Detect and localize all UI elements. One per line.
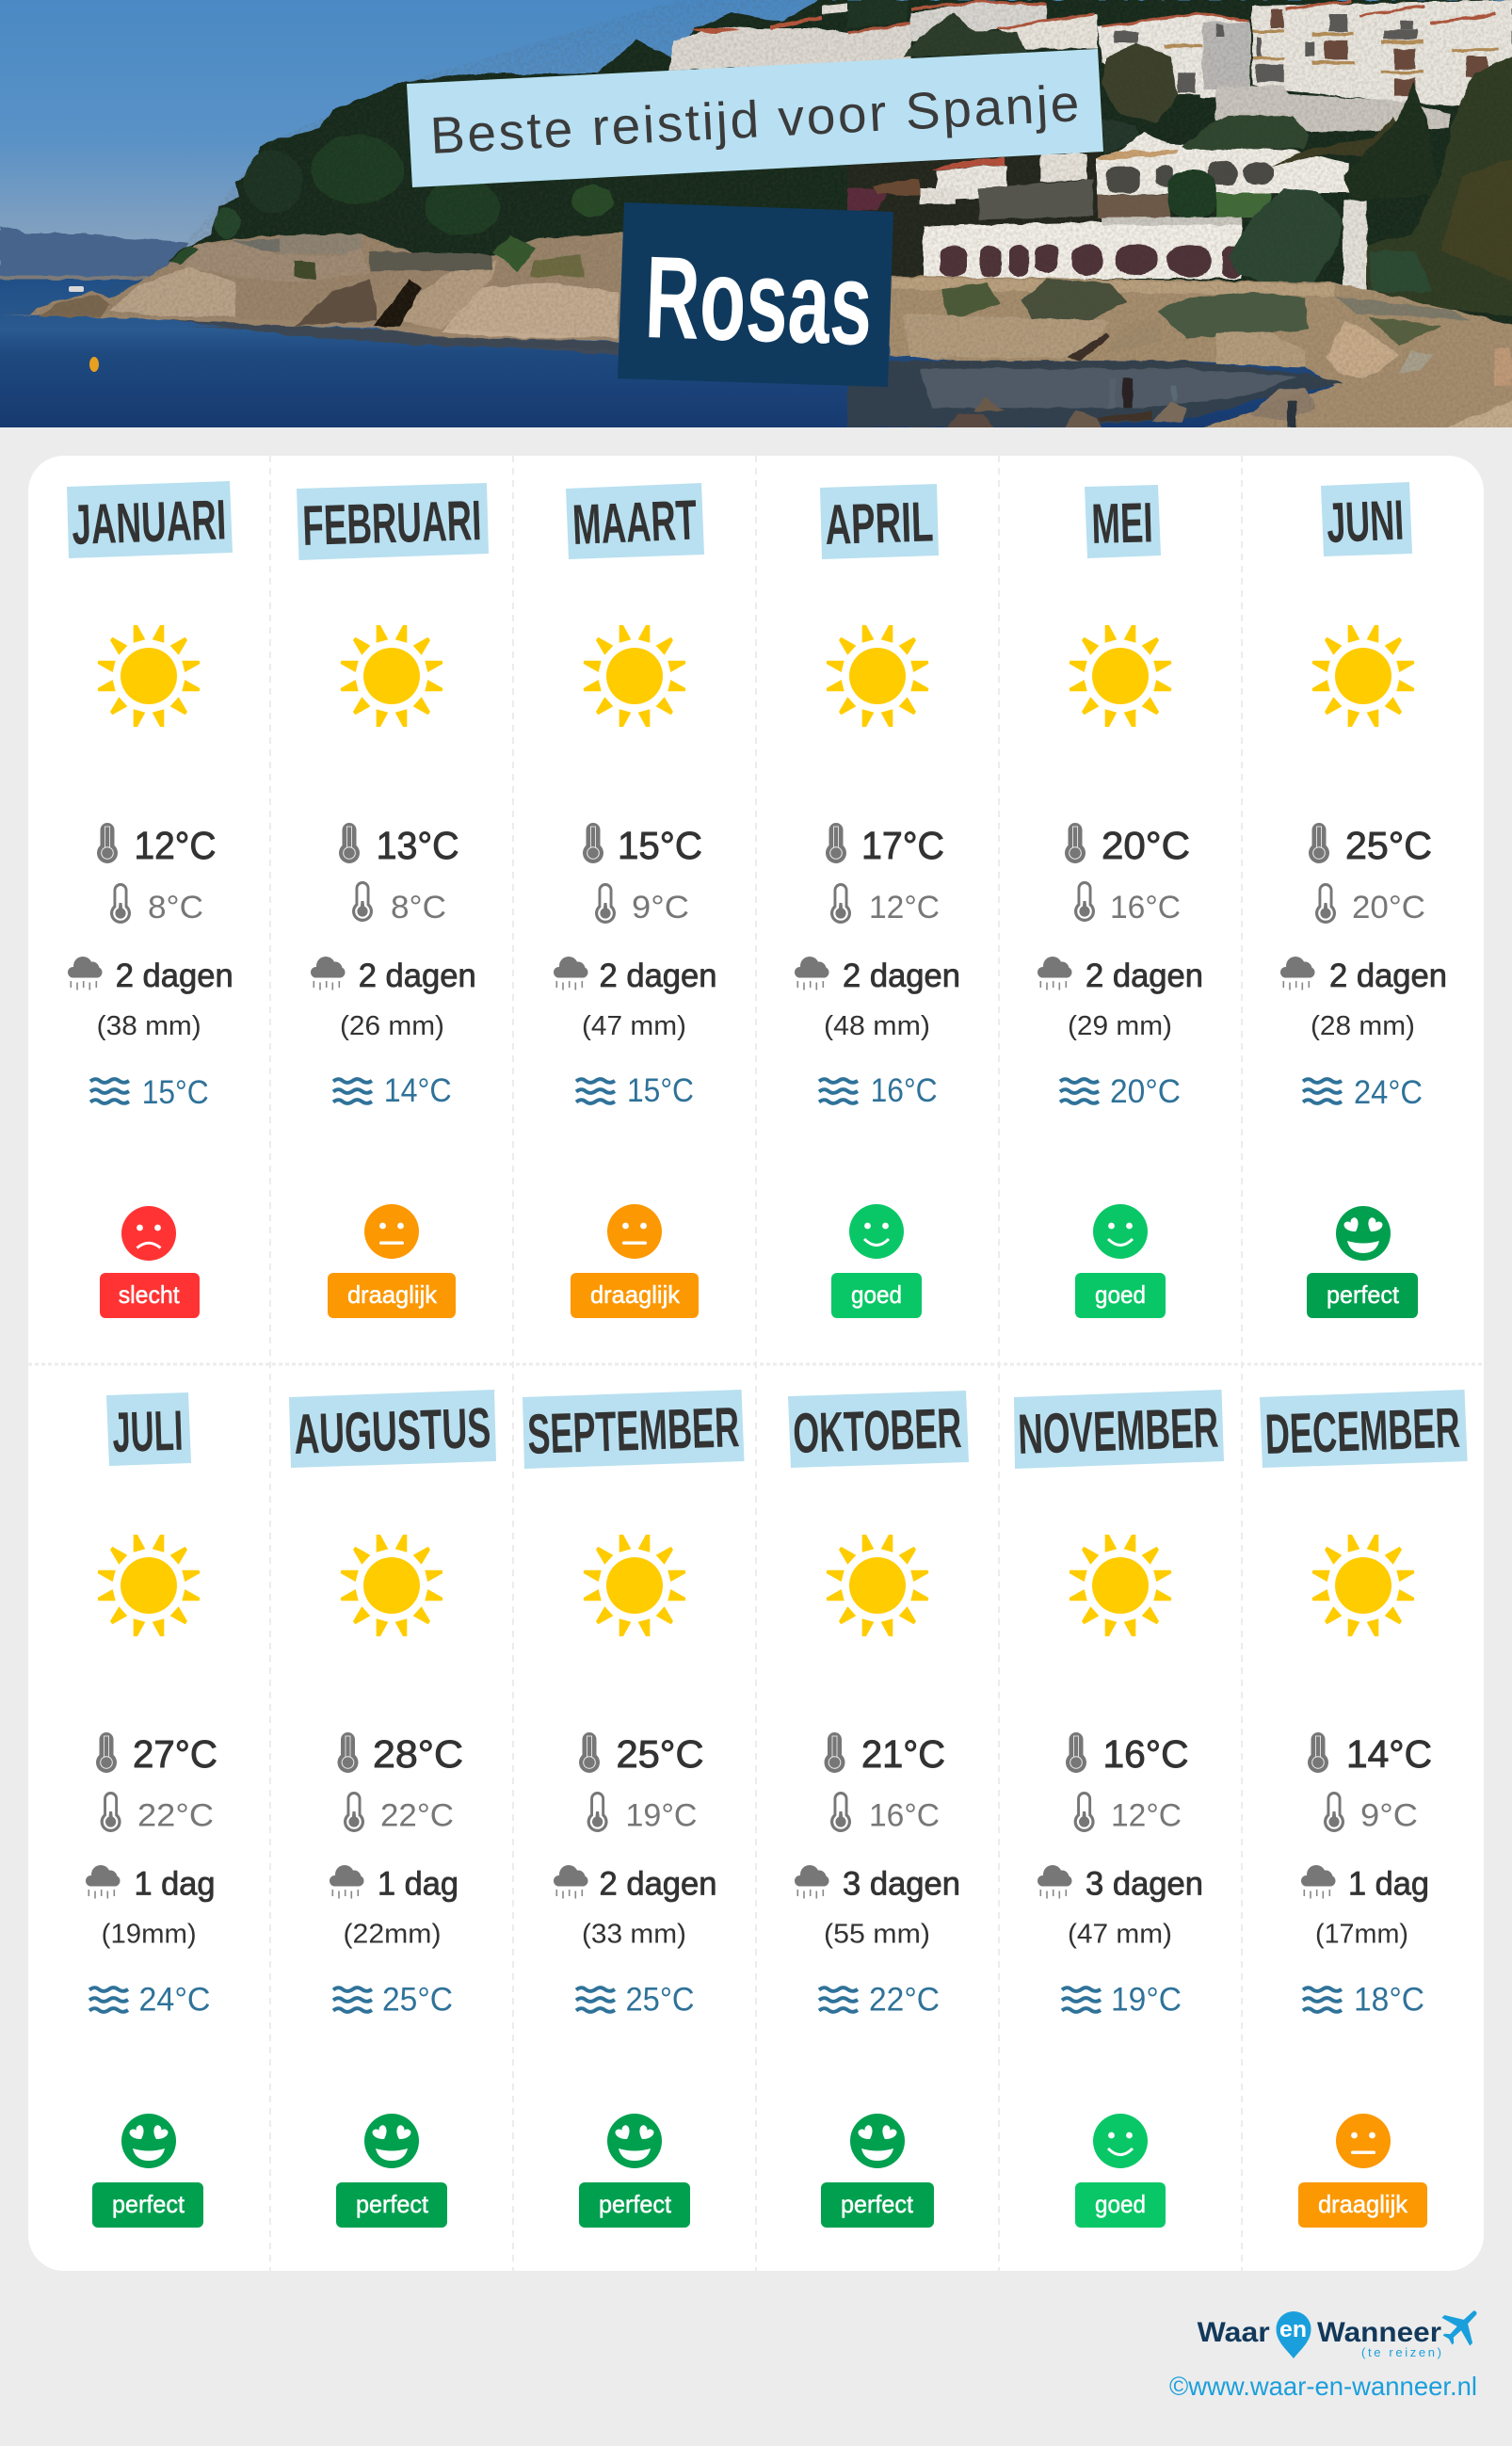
minimum temperature: 8°C <box>148 890 203 925</box>
rainfall: (28 mm) <box>1311 1011 1415 1041</box>
left-hand cliff details drawn in crop coordinates <box>0 135 626 350</box>
month heading <box>523 1390 744 1469</box>
minimum temperature <box>1074 1792 1182 1834</box>
sea temperature: 24°C <box>139 1981 211 2019</box>
minimum temperature: 20°C <box>1352 890 1425 925</box>
header photo: coastal village of Rosas <box>0 0 1512 430</box>
minimum temperature <box>110 883 203 925</box>
rating: draaglijk <box>1298 2114 1427 2228</box>
rain days: 2 dagen <box>599 1866 717 1902</box>
maximum temperature <box>1309 823 1432 867</box>
rating: slecht <box>100 1206 200 1318</box>
icon: sun <box>827 1535 928 1636</box>
logo: Waar en Wanneer: Waar <box>1198 2317 1270 2348</box>
maximum temperature: 16°C <box>1103 1732 1188 1776</box>
month heading: MEI <box>1091 491 1153 555</box>
sea temperature <box>1060 1073 1181 1110</box>
rain days: 3 dagen <box>843 1866 960 1902</box>
rating: goed: goed <box>851 1280 902 1309</box>
title banner <box>407 49 1103 187</box>
rain days <box>554 957 717 994</box>
maximum temperature: 20°C <box>1102 824 1190 867</box>
rain days: 2 dagen <box>1086 957 1203 994</box>
sea temperature: 25°C <box>625 1981 695 2019</box>
rating: draaglijk <box>571 1204 699 1318</box>
sea temperature: 15°C <box>627 1072 694 1109</box>
rainfall: (48 mm) <box>824 1011 930 1041</box>
icon: sun <box>98 1535 200 1636</box>
sea temperature <box>333 1072 452 1109</box>
sea temperature: 16°C <box>871 1072 938 1109</box>
rainfall: (29 mm) <box>1068 1011 1172 1041</box>
month heading: MAART <box>571 489 698 556</box>
logo: Waar en Wanneer: en <box>1279 2317 1307 2342</box>
sea temperature <box>90 1074 209 1111</box>
panel: maart <box>554 483 717 1318</box>
rating: perfect <box>336 2114 447 2228</box>
destination name: Rosas <box>643 233 875 370</box>
rating: perfect: perfect <box>112 2190 185 2218</box>
rain days: 2 dagen <box>116 957 233 994</box>
icon: sun <box>1070 625 1171 727</box>
sea temperature <box>819 1981 940 2019</box>
sea temperature <box>89 1981 211 2019</box>
maximum temperature: 17°C <box>861 824 944 867</box>
month heading <box>106 1392 191 1466</box>
minimum temperature <box>1315 883 1425 925</box>
month heading: FEBRUARI <box>301 489 482 557</box>
month heading <box>820 484 939 559</box>
panel: augustus <box>289 1390 496 2228</box>
month heading <box>1321 482 1412 556</box>
rating: goed <box>1075 2114 1166 2228</box>
icon: sun <box>1070 1535 1171 1636</box>
month heading <box>297 483 489 560</box>
rain days <box>311 957 476 994</box>
maximum temperature <box>825 1732 945 1776</box>
rain days <box>68 957 233 994</box>
destination banner <box>618 202 893 387</box>
icon: sun <box>584 1535 685 1636</box>
rain days: 2 dagen <box>843 957 960 994</box>
icon: sun <box>1312 625 1414 727</box>
rainfall: (26 mm) <box>340 1011 444 1041</box>
panel: oktober <box>788 1391 969 2228</box>
panel: april <box>795 484 960 1318</box>
month heading <box>1014 1390 1224 1469</box>
panel: climate table <box>28 456 1484 2271</box>
month heading: JULI <box>111 1399 184 1464</box>
minimum temperature <box>830 883 940 925</box>
rain days: 3 dagen <box>1086 1866 1203 1902</box>
minimum temperature: 9°C <box>632 890 689 925</box>
month heading: OKTOBER <box>792 1396 962 1465</box>
icon: sun <box>341 625 442 727</box>
icon: sun <box>827 625 928 727</box>
rating: goed <box>831 1204 922 1318</box>
minimum temperature <box>101 1792 214 1834</box>
rating: draaglijk: draaglijk <box>1318 2190 1408 2218</box>
sea temperature <box>819 1072 938 1109</box>
white terraced houses and terraces drawn in crop coordinates <box>669 0 1512 430</box>
panel: februari <box>297 483 489 1318</box>
rainfall: (17mm) <box>1315 1919 1408 1949</box>
minimum temperature <box>830 1792 940 1834</box>
maximum temperature: 28°C <box>373 1732 463 1776</box>
minimum temperature <box>344 1792 454 1834</box>
sea temperature: 20°C <box>1110 1073 1181 1110</box>
sea temperature: 22°C <box>869 1981 940 2019</box>
logo: Waar en Wanneer: Wanneer <box>1317 2317 1441 2348</box>
maximum temperature: 13°C <box>377 824 459 867</box>
rating: draaglijk <box>328 1204 456 1318</box>
maximum temperature: 21°C <box>861 1732 945 1776</box>
minimum temperature <box>595 883 689 925</box>
maximum temperature: 12°C <box>134 824 217 867</box>
minimum temperature: 22°C <box>137 1798 214 1834</box>
icon: map pin <box>1277 2311 1311 2358</box>
month heading <box>1085 485 1161 558</box>
sea temperature: 14°C <box>384 1072 452 1109</box>
minimum temperature: 9°C <box>1360 1798 1418 1834</box>
sea temperature <box>1062 1981 1182 2019</box>
minimum temperature: 16°C <box>1110 890 1181 925</box>
rain days <box>795 1865 960 1902</box>
minimum temperature <box>352 881 446 925</box>
rating: perfect <box>821 2114 934 2228</box>
rainfall: (55 mm) <box>824 1919 930 1949</box>
rainfall: (22mm) <box>343 1919 441 1949</box>
month heading: JUNI <box>1326 489 1405 555</box>
panel: juli <box>86 1392 217 2228</box>
icon: sun <box>98 625 200 727</box>
minimum temperature: 12°C <box>869 890 940 925</box>
month heading: JANUARI <box>71 488 227 556</box>
rain days <box>330 1865 458 1902</box>
rain days: 2 dagen <box>1329 957 1447 994</box>
minimum temperature <box>587 1792 697 1834</box>
rating: draaglijk: draaglijk <box>347 1280 438 1309</box>
logo: Waar en Wanneer <box>1198 2297 1490 2359</box>
rating: perfect <box>579 2114 690 2228</box>
panel: mei <box>1037 485 1203 1318</box>
rainfall: (47 mm) <box>582 1011 686 1041</box>
icon: sun <box>1312 1535 1414 1636</box>
rating: draaglijk: draaglijk <box>590 1280 681 1309</box>
rain days <box>86 1865 215 1902</box>
sea temperature <box>1303 1074 1423 1111</box>
maximum temperature <box>583 823 702 867</box>
rating: perfect: perfect <box>1327 1280 1400 1309</box>
maximum temperature <box>96 1732 217 1776</box>
sea temperature <box>333 1981 453 2019</box>
maximum temperature <box>339 823 459 867</box>
panel: november <box>1014 1390 1224 2228</box>
month heading <box>289 1390 496 1468</box>
minimum temperature: 16°C <box>869 1798 940 1834</box>
minimum temperature: 12°C <box>1111 1798 1182 1834</box>
minimum temperature: 22°C <box>380 1798 454 1834</box>
sea temperature: 19°C <box>1111 1981 1182 2019</box>
rating: perfect: perfect <box>356 2190 429 2218</box>
rain days: 1 dag <box>1348 1866 1429 1902</box>
rain days <box>795 957 960 994</box>
panel: december <box>1260 1390 1468 2228</box>
rating: goed: goed <box>1095 1280 1146 1309</box>
month heading: SEPTEMBER <box>526 1395 740 1466</box>
rating: perfect: perfect <box>599 2190 672 2218</box>
maximum temperature <box>1308 1732 1432 1776</box>
rating: goed <box>1075 1204 1166 1318</box>
rain days: 1 dag <box>134 1866 215 1902</box>
icon: airplane <box>1434 2297 1490 2354</box>
month heading <box>788 1391 969 1468</box>
sea temperature: 15°C <box>142 1074 209 1111</box>
rain days: 2 dagen <box>599 957 717 994</box>
panel: september <box>523 1390 744 2228</box>
month heading <box>566 483 704 559</box>
sea temperature <box>576 1072 694 1109</box>
sea temperature <box>1303 1981 1424 2019</box>
month heading: APRIL <box>824 490 934 556</box>
rating: goed: goed <box>1095 2190 1146 2218</box>
panel: juni <box>1280 482 1447 1318</box>
month heading: AUGUSTUS <box>293 1396 491 1466</box>
rainfall: (47 mm) <box>1068 1919 1172 1949</box>
icon: sun <box>341 1535 442 1636</box>
rating: slecht: slecht <box>119 1280 180 1309</box>
sea temperature <box>576 1981 695 2019</box>
maximum temperature <box>826 823 944 867</box>
copyright url: ©www.waar-en-wanneer.nl <box>1169 2372 1477 2401</box>
maximum temperature: 25°C <box>1345 824 1432 867</box>
sea temperature: 24°C <box>1354 1074 1423 1111</box>
maximum temperature: 14°C <box>1346 1732 1432 1776</box>
month heading: NOVEMBER <box>1017 1396 1219 1466</box>
sea temperature: 18°C <box>1354 1981 1424 2019</box>
sea temperature: 25°C <box>382 1981 453 2019</box>
rating: perfect <box>1307 1206 1418 1318</box>
rain days <box>1301 1865 1429 1902</box>
maximum temperature: 15°C <box>618 824 702 867</box>
panel: januari <box>67 481 233 1318</box>
maximum temperature <box>579 1732 704 1776</box>
minimum temperature: 19°C <box>625 1798 697 1834</box>
rating: perfect <box>92 2114 203 2228</box>
rainfall: (19mm) <box>102 1919 197 1949</box>
maximum temperature <box>1065 823 1190 867</box>
logo: Waar en Wanneer: (te reizen) <box>1361 2345 1441 2359</box>
maximum temperature <box>337 1732 463 1776</box>
rain days <box>1037 957 1203 994</box>
minimum temperature <box>1074 881 1181 925</box>
minimum temperature: 8°C <box>391 890 446 925</box>
rain days <box>1037 1865 1203 1902</box>
maximum temperature: 27°C <box>133 1732 217 1776</box>
title text: Beste reistijd voor Spanje <box>428 73 1081 165</box>
rain days: 1 dag <box>378 1866 458 1902</box>
maximum temperature: 25°C <box>616 1732 704 1776</box>
month heading <box>67 481 233 558</box>
rainfall: (33 mm) <box>582 1919 686 1949</box>
minimum temperature <box>1324 1792 1418 1834</box>
rain days: 2 dagen <box>359 957 476 994</box>
rating: perfect: perfect <box>841 2190 914 2218</box>
maximum temperature <box>1066 1732 1188 1776</box>
icon: sun <box>584 625 685 727</box>
photo grain <box>0 0 1512 427</box>
maximum temperature <box>97 823 217 867</box>
rain days <box>1280 957 1447 994</box>
rainfall: (38 mm) <box>97 1011 201 1041</box>
